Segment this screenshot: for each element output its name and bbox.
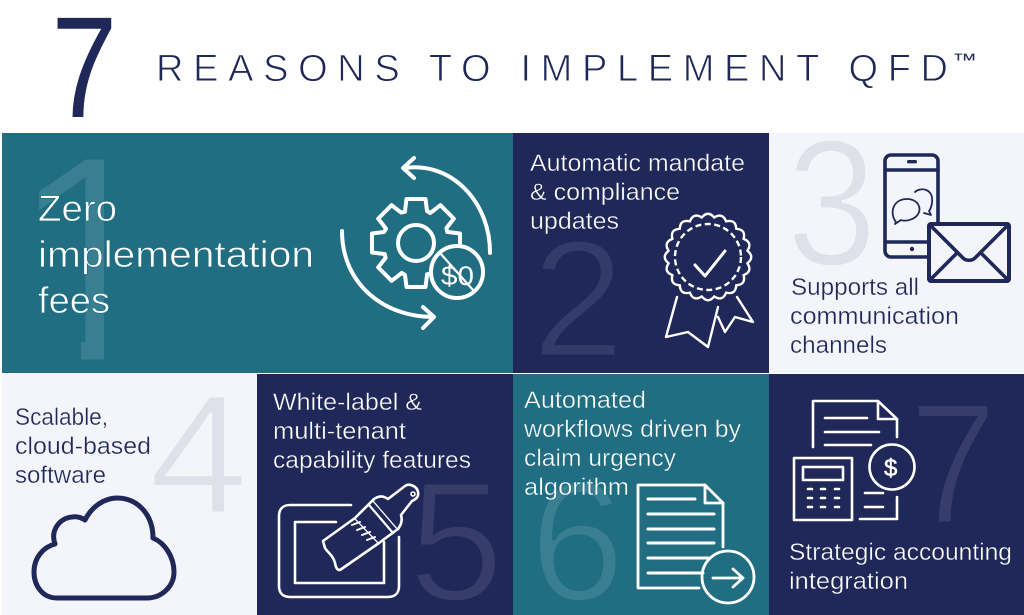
heading 7: Strategic accounting bbox=[789, 539, 1012, 566]
icon: phone and envelope bbox=[885, 155, 1009, 281]
heading 6: workflows driven by bbox=[523, 416, 741, 443]
title text: REASONS TO IMPLEMENT QFD bbox=[156, 48, 948, 90]
panel 3: communication channels bbox=[769, 103, 1024, 373]
heading 3: channels bbox=[790, 332, 887, 359]
numeral 4: 4 bbox=[149, 359, 248, 549]
title bbox=[52, 0, 977, 148]
icon: cloud bbox=[34, 498, 174, 598]
heading 1: Zero bbox=[38, 188, 117, 229]
heading 2: Automatic mandate bbox=[530, 150, 745, 177]
heading 5: White-label & bbox=[273, 389, 422, 416]
panel 6: automated workflows bbox=[513, 374, 769, 615]
heading 4: software bbox=[15, 462, 106, 489]
heading 2: updates bbox=[530, 208, 619, 235]
numeral 1: 1 bbox=[8, 93, 174, 426]
icon: award rosette bbox=[665, 214, 753, 347]
heading 7: integration bbox=[789, 568, 908, 595]
heading 1 bbox=[38, 188, 314, 321]
heading 1: fees bbox=[38, 280, 110, 321]
heading 3: Supports all bbox=[791, 274, 919, 301]
icon: paint brush on screen bbox=[279, 485, 418, 597]
heading 4: Scalable, bbox=[15, 404, 108, 431]
icon: gear with circular arrows and zero dollars: $0 bbox=[441, 261, 474, 291]
trademark: ™ bbox=[952, 50, 977, 70]
icon: document with arrow bbox=[638, 485, 754, 603]
heading 7 bbox=[789, 539, 1012, 595]
heading 2 bbox=[530, 150, 745, 235]
heading 6: Automated bbox=[524, 387, 646, 414]
icon: invoice, calculator and dollar coin: $ bbox=[884, 455, 897, 482]
heading 3 bbox=[790, 274, 959, 359]
heading 6: claim urgency bbox=[524, 445, 676, 472]
panel 2: mandate and compliance updates bbox=[513, 133, 769, 392]
panel 1: zero implementation fees bbox=[2, 133, 513, 373]
heading 6 bbox=[523, 387, 741, 501]
heading 5 bbox=[273, 389, 471, 474]
panel 7: strategic accounting integration bbox=[769, 367, 1024, 615]
heading 3: communication bbox=[790, 303, 959, 330]
numeral 3: 3 bbox=[787, 103, 877, 304]
icon: gear with circular arrows and zero dollars bbox=[342, 158, 490, 328]
panel 5: white-label and multi-tenant bbox=[257, 374, 513, 615]
heading 5: capability features bbox=[273, 447, 471, 474]
heading 1: implementation bbox=[38, 234, 314, 275]
numeral 2: 2 bbox=[532, 207, 624, 392]
heading 2: & compliance bbox=[530, 179, 680, 206]
heading 6: algorithm bbox=[524, 474, 629, 501]
heading 5: multi-tenant bbox=[273, 418, 406, 445]
numeral 7: 7 bbox=[910, 367, 997, 560]
icon: invoice, calculator and dollar coin bbox=[794, 401, 914, 520]
panel 4: scalable cloud software bbox=[2, 359, 257, 615]
heading 4: cloud-based bbox=[15, 433, 151, 460]
heading 4 bbox=[15, 404, 151, 489]
